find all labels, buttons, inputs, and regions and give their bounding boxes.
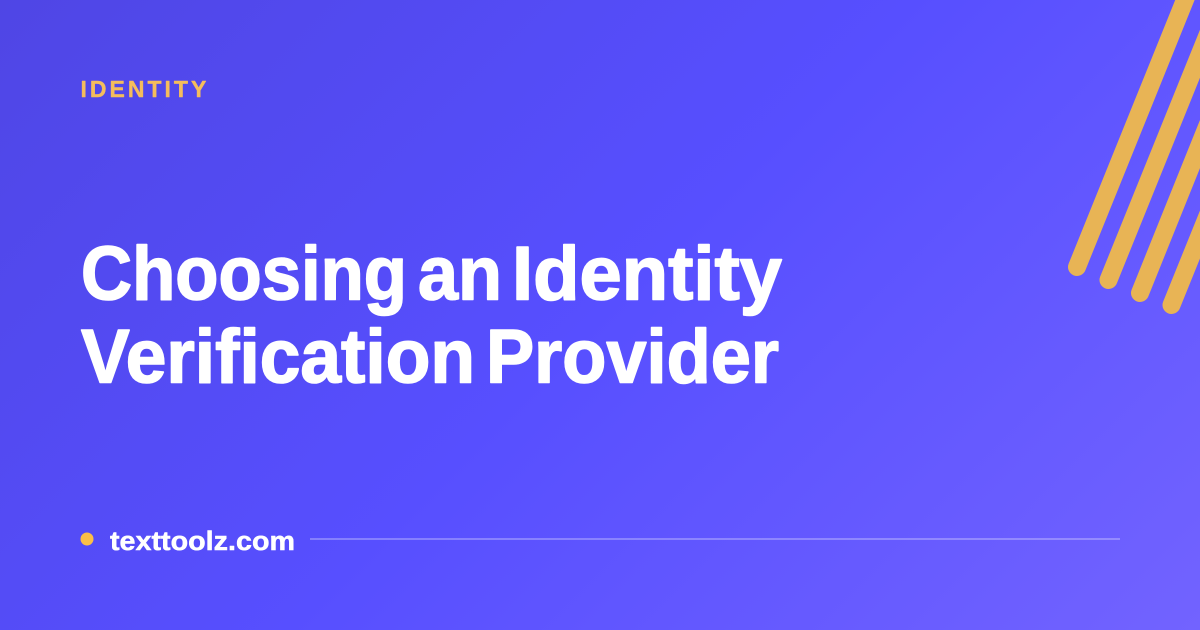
title xyxy=(81,232,782,400)
title: Verification xyxy=(81,314,475,400)
title: Provider xyxy=(486,314,779,400)
footer site name: texttoolz.com xyxy=(110,526,295,556)
title: Identity xyxy=(512,232,782,316)
title: Choosing xyxy=(81,232,407,316)
category label: IDENTITY xyxy=(80,76,209,102)
footer bullet xyxy=(80,532,94,546)
footer rule xyxy=(310,538,1120,540)
title: an xyxy=(418,232,502,316)
icon: decorative diagonal stripes xyxy=(1077,0,1200,305)
